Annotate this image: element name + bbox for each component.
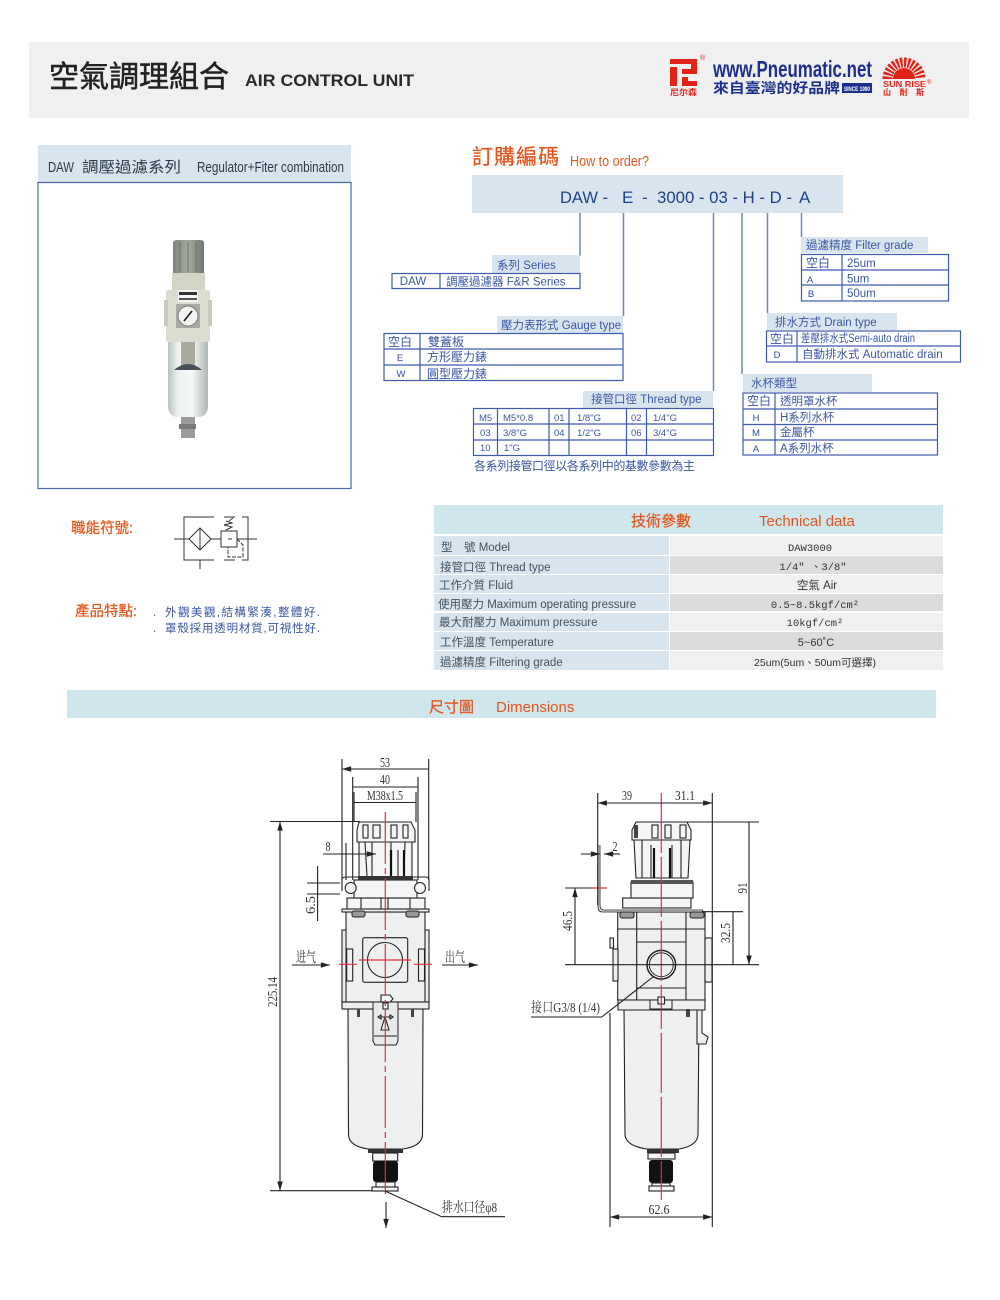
dimensions heading band: 尺寸圖: [429, 699, 474, 716]
product features: 產品特點:: [75, 603, 137, 620]
table: drain type: [766, 313, 961, 362]
front view body: [342, 822, 429, 1191]
technical data table: 最大耐壓力 Maximum pressure: [439, 615, 597, 629]
order code bar: E: [622, 188, 633, 207]
technical data table: 5~60˚C: [798, 637, 834, 649]
table heading: 技術參數: [631, 513, 691, 530]
table: thread type: 10: [480, 443, 491, 454]
how to order heading: [472, 146, 649, 170]
table heading: Technical data: [759, 513, 856, 530]
table: series: DAW: [400, 276, 426, 288]
side view body: [598, 822, 712, 1191]
panel: product photo: [38, 145, 351, 488]
front view dimension lines: [270, 759, 505, 1228]
panel heading: DAW: [48, 159, 75, 176]
technical data table: 空氣 Air: [797, 578, 837, 592]
front view dimension labels: 225.14: [266, 977, 281, 1007]
front view dimension labels: 进气: [296, 950, 316, 966]
order code bar: A: [799, 188, 811, 207]
panel heading: 調壓過濾系列: [82, 159, 181, 176]
logo: website and slogan: www.Pneumatic.net: [712, 56, 872, 82]
side view dimension labels: [531, 789, 751, 1218]
table: thread type: [473, 391, 714, 456]
side view dimension labels: 2: [612, 840, 618, 855]
table: series: 系列 Series: [497, 259, 556, 272]
dimensions heading band: [67, 690, 936, 718]
title: 空氣調理組合: [49, 61, 229, 94]
front view dimension labels: 53: [380, 756, 390, 771]
table: series: 調壓過濾器 F&R Series: [446, 274, 566, 288]
logo: website and slogan: 來自臺灣的好品牌: [713, 80, 840, 96]
side view dimension labels: 32.5: [719, 923, 734, 943]
table: thread type: 1"G: [504, 443, 520, 454]
how to order heading: 訂購編碼: [472, 146, 560, 169]
front view dimension labels: 6.5: [304, 896, 319, 914]
order code bar: [472, 175, 843, 213]
table: thread type: 02: [631, 413, 642, 424]
technical data table: 1/4" 、3/8": [779, 562, 847, 574]
side view centre line: [660, 793, 662, 1200]
logo: sun rise: ®: [927, 79, 932, 86]
technical data table: 接管口徑 Thread type: [440, 560, 551, 574]
table: bowl type: 空白: [747, 393, 771, 408]
front view dimension labels: 出气: [445, 950, 465, 966]
logo: red R mark: 尼尔森: [670, 87, 697, 97]
order code bar: -: [642, 188, 648, 207]
technical data table: 型 號 Model: [441, 540, 510, 554]
table: drain type: D: [774, 350, 781, 361]
table: gauge type: W: [397, 369, 406, 380]
front view dimension labels: 40: [380, 773, 390, 788]
header band: [29, 42, 969, 118]
table: bowl type: M: [752, 428, 760, 439]
table: thread type: 1/4"G: [653, 413, 677, 424]
technical data table: 25um(5um、50um可選擇): [754, 656, 876, 669]
table: bowl type: H系列水杯: [780, 410, 835, 424]
dimension drawing: side view: [531, 789, 759, 1227]
side view dimension labels: 62.6: [648, 1203, 670, 1218]
side view dimension labels: 接口G3/8 (1/4): [531, 999, 600, 1016]
table: bowl type: [743, 374, 938, 455]
logo: sun rise: [883, 63, 932, 97]
table: thread type: 3/8"G: [503, 428, 527, 439]
side view dimension labels: 39: [622, 789, 632, 804]
technical data table: DAW3000: [788, 543, 832, 555]
product features: .: [153, 607, 156, 619]
product image of filter regulator: [164, 240, 212, 438]
front view dimension labels: 8: [326, 840, 330, 855]
table: bowl type: 金屬杯: [780, 425, 815, 439]
table: thread type: 接管口徑 Thread type: [591, 392, 702, 406]
table: gauge type: 雙蓋板: [428, 335, 464, 349]
table: drain type: 空白: [770, 331, 794, 346]
order code bar: DAW -: [560, 188, 608, 207]
table: gauge type: 空白: [388, 334, 412, 349]
table: filter grade: B: [808, 289, 814, 300]
thread note: 各系列接管口徑以各系列中的基數參數為主: [474, 458, 695, 473]
product features: [75, 603, 320, 635]
technical data table: 過濾精度 Filtering grade: [440, 655, 563, 669]
table: filter grade: 25um: [847, 258, 876, 270]
front view centre lines: [384, 812, 386, 1198]
logo: red R mark: [670, 54, 706, 97]
technical data table: 使用壓力 Maximum operating pressure: [438, 597, 636, 611]
table: thread type: 01: [554, 413, 565, 424]
technical data table: 工作溫度 Temperature: [440, 635, 554, 649]
logo: red R mark: ®: [700, 54, 706, 62]
table: filter grade: [801, 237, 949, 301]
table: filter grade: 5um: [847, 274, 869, 286]
table: filter grade: 過濾精度 Filter grade: [806, 238, 913, 252]
table: thread type: 1/8"G: [577, 413, 601, 424]
table: gauge type: 方形壓力錶: [427, 349, 487, 364]
table: drain type: 排水方式 Drain type: [775, 315, 877, 329]
icon: pneumatic function symbol: [174, 517, 257, 569]
table: gauge type: [384, 316, 623, 381]
english title: AIR CONTROL UNIT: [245, 71, 415, 90]
panel heading english: Regulator+Fiter combination: [197, 159, 344, 176]
table: bowl type: A: [753, 444, 760, 455]
dimensions heading band: Dimensions: [496, 699, 574, 716]
product features: 外觀美觀,結構緊湊,整體好.: [165, 605, 320, 619]
table: filter grade: 50um: [847, 288, 876, 300]
technical data table: 10kgf/cm²: [787, 618, 843, 630]
table: thread type: M5*0.8: [503, 413, 533, 424]
function symbol label: 職能符號:: [71, 519, 133, 537]
table: thread type: 1/2"G: [577, 428, 601, 439]
table: thread type: 03: [480, 428, 491, 439]
table: thread type: 04: [554, 428, 565, 439]
product features: 罩殼採用透明材質,可視性好.: [165, 621, 320, 635]
table: gauge type: E: [397, 353, 403, 364]
table: drain type: 自動排水式 Automatic drain: [802, 347, 943, 361]
table: gauge type: 壓力表形式 Gauge type: [501, 318, 621, 332]
table: filter grade: A: [807, 275, 814, 286]
side view dimension labels: 46.5: [561, 911, 576, 931]
table: filter grade: 空白: [806, 255, 830, 270]
table: bowl type: 透明罩水杯: [780, 394, 838, 408]
table: gauge type: 圓型壓力錶: [427, 366, 487, 381]
table: thread type: 06: [631, 428, 642, 439]
product features: .: [153, 623, 156, 635]
table heading: [631, 513, 856, 530]
table: thread type: 3/4"G: [653, 428, 677, 439]
side view dimension labels: 31.1: [675, 789, 695, 804]
connector lines from code to option tables: [580, 213, 802, 391]
table: series: [392, 255, 580, 289]
table: bowl type: H: [753, 413, 760, 424]
how to order heading: How to order?: [570, 153, 649, 170]
front view dimension labels: [266, 756, 497, 1216]
front view dimension labels: M38x1.5: [367, 789, 403, 804]
logo: website and slogan: SINCE 1990: [844, 86, 870, 93]
dimension drawing: front view: [266, 756, 505, 1228]
side view dimension labels: 91: [736, 882, 751, 894]
logo: website and slogan: [712, 56, 872, 96]
table: bowl type: 水杯類型: [751, 376, 797, 390]
side view dimension lines: [531, 793, 759, 1227]
logo: sun rise: SUN RISE: [883, 79, 926, 89]
technical data table: 0.5~8.5kgf/cm²: [771, 600, 859, 612]
table: thread type: M5: [479, 413, 492, 424]
technical data table: 工作介質 Fluid: [439, 578, 513, 592]
technical data table: [434, 505, 943, 670]
table: bowl type: A系列水杯: [780, 441, 834, 455]
order code bar: 3000 - 03 - H - D -: [657, 188, 792, 207]
table: drain type: 差壓排水式Semi-auto drain: [801, 331, 915, 345]
front view dimension labels: 排水口径φ8: [442, 1199, 497, 1216]
logo: sun rise: 山 耐 斯: [883, 87, 924, 97]
